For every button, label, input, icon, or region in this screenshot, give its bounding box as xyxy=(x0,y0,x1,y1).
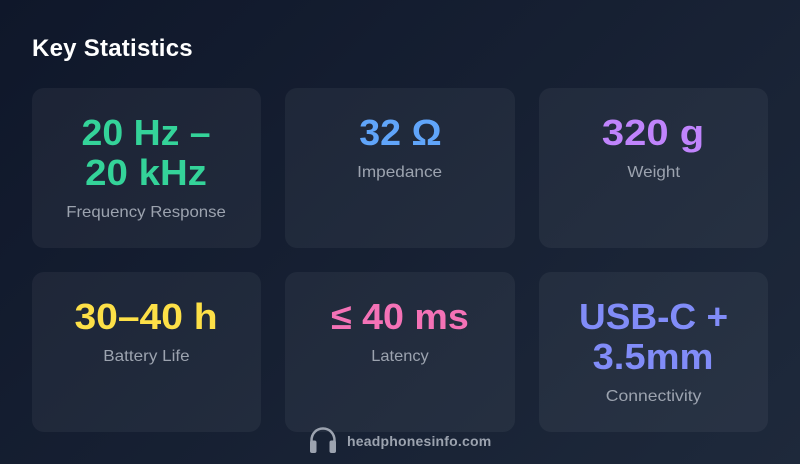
value: battery life: 30–40 h xyxy=(75,296,218,337)
value: weight: 320 g xyxy=(602,112,705,153)
label: connectivity: Connectivity xyxy=(606,388,701,405)
panel: frequency response xyxy=(32,88,261,248)
brand text: headphonesinfo.com xyxy=(347,433,491,449)
label: impedance: Impedance xyxy=(357,164,443,181)
panel: latency xyxy=(285,272,515,432)
value: connectivity: 3.5mm xyxy=(593,336,714,377)
panel: impedance xyxy=(285,88,515,248)
value: frequency range: 20 Hz – xyxy=(82,112,211,153)
value: connectivity xyxy=(579,296,728,377)
icon: headphones xyxy=(310,427,336,453)
label: battery life: Battery Life xyxy=(103,348,190,365)
panel: battery life xyxy=(32,272,261,432)
value: latency: ≤ 40 ms xyxy=(331,296,469,337)
value: frequency range xyxy=(82,112,211,193)
value: connectivity: USB-C + xyxy=(579,296,728,337)
panel: weight xyxy=(539,88,768,248)
value: frequency range: 20 kHz xyxy=(86,152,207,193)
label: weight: Weight xyxy=(627,164,680,181)
value: impedance: 32 Ω xyxy=(359,112,441,153)
title: Key Statistics xyxy=(32,35,193,62)
panel: connectivity xyxy=(539,272,768,432)
label: latency: Latency xyxy=(371,348,429,365)
label: frequency response: Frequency Response xyxy=(67,204,226,221)
